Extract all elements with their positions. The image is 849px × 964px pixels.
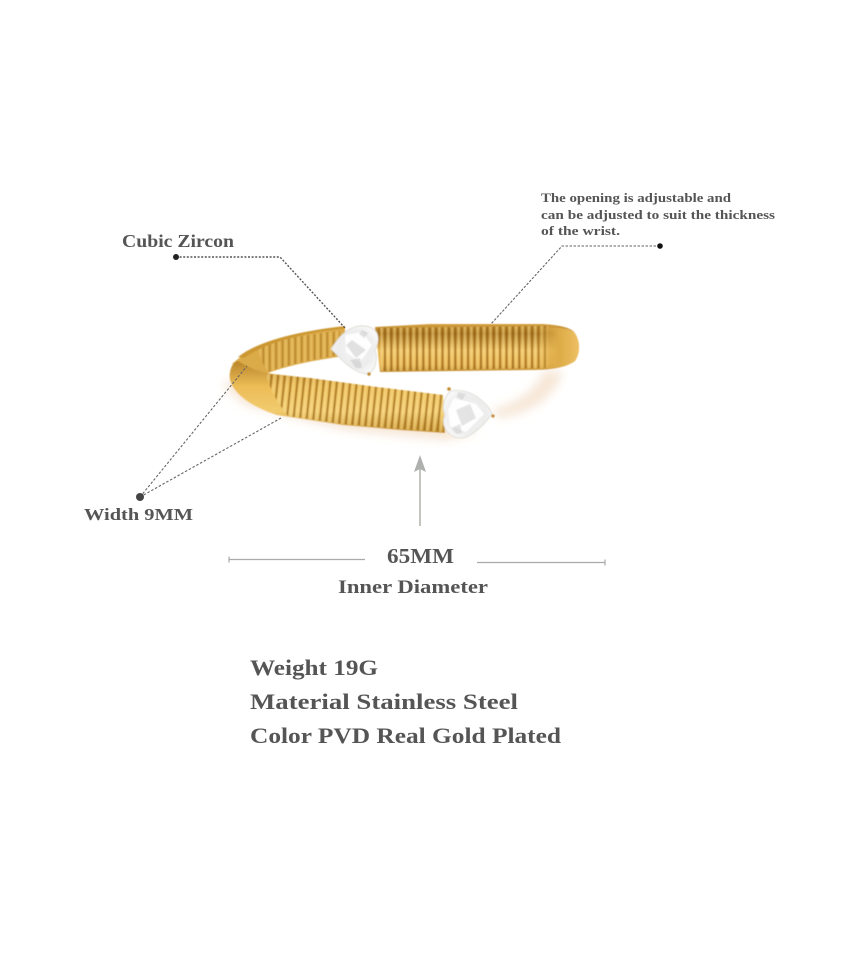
spec: color: Color PVD Real Gold Plated bbox=[250, 723, 561, 748]
dimension line left bbox=[229, 556, 365, 562]
back band inner ribs bbox=[258, 331, 340, 372]
note text: of the wrist. bbox=[541, 224, 620, 238]
label: cubic zircon: Cubic Zircon bbox=[122, 231, 234, 251]
callout: width bbox=[84, 366, 281, 524]
bracelet photo bbox=[222, 324, 579, 440]
label: width: Width 9MM bbox=[84, 505, 193, 524]
back band ribs bbox=[378, 326, 548, 371]
callout: adjustable opening bbox=[491, 191, 775, 324]
leader lines bbox=[140, 366, 281, 497]
note text: can be adjusted to suit the thickness bbox=[541, 208, 775, 222]
leader dot bbox=[136, 493, 144, 501]
note text bbox=[541, 191, 775, 238]
back band right end highlight bbox=[536, 327, 579, 369]
leader line bbox=[491, 246, 660, 324]
bracelet soft shadow bbox=[222, 370, 563, 440]
dimension: inner diameter bbox=[229, 544, 605, 598]
front band ribs bbox=[266, 374, 444, 432]
leader dot bbox=[657, 243, 663, 249]
dimension line right bbox=[477, 560, 605, 566]
heart stone: lower bbox=[443, 387, 495, 438]
note text: The opening is adjustable and bbox=[541, 191, 731, 205]
back band outer surface bbox=[375, 324, 579, 372]
leader dot bbox=[173, 254, 179, 260]
front band bbox=[230, 361, 445, 433]
back band inner surface bbox=[232, 327, 345, 374]
back band top rim bbox=[238, 326, 345, 358]
spec: material: Material Stainless Steel bbox=[250, 689, 518, 714]
arrow: diameter pointer bbox=[414, 455, 426, 526]
heart stone: upper bbox=[331, 326, 378, 376]
specification list bbox=[250, 655, 561, 748]
leader line bbox=[176, 257, 345, 328]
spec: weight: Weight 19G bbox=[250, 655, 378, 680]
dimension label: Inner Diameter bbox=[338, 577, 489, 598]
dimension value: 65MM bbox=[387, 544, 454, 568]
callout: cubic zircon bbox=[122, 231, 345, 328]
